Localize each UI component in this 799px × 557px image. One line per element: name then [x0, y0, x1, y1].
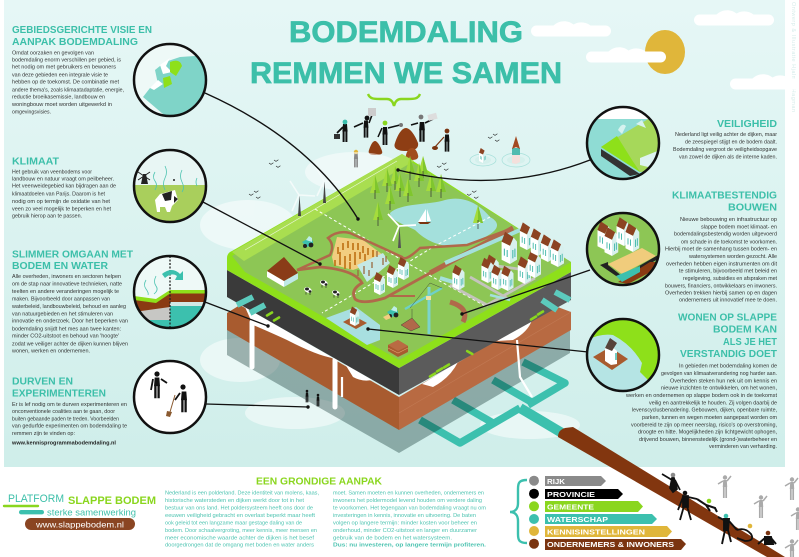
text block: slimmer omgaan [11, 250, 133, 354]
sun [645, 30, 685, 74]
title bracket [368, 94, 420, 106]
section: een grondige aanpak: historische watersteden en dijken werkt door tot in het [165, 498, 304, 504]
section: een grondige aanpak: EEN GRONDIGE AANPAK [256, 477, 383, 488]
legend labels: GEMEENTE [547, 502, 594, 512]
text block: klimaat: KLIMAAT [12, 156, 59, 168]
text block: durven en experimenteren: DURVEN EN [12, 376, 73, 387]
text block: slimmer omgaan: van natuurgebieden en het stimuleren van [12, 311, 113, 317]
text block: klimaat: nodig om op termijn de oxidatie van het [12, 199, 110, 205]
text block: klimaatbestendig bouwen: KLIMAATBESTENDIG [672, 191, 777, 202]
text block: gebiedsgerichte visie: andere thema's, zoals klimaatadaptatie, energie, [12, 87, 124, 93]
text block: wonen op slappe bodem: levenscyclusbenadering. Gebouwen, dijken, openbare ruimte, [632, 408, 777, 414]
section: een grondige aanpak: bestuur van ons land. Het poldersysteem heeft ons door de [165, 505, 313, 511]
text block: klimaatbestendig bouwen: watersystemen worden gezocht. Alle [688, 254, 777, 260]
legend item: gemeente [529, 501, 643, 512]
section: een grondige aanpak: investeringen in kennis, innovatie en uitvoering. De baten [333, 513, 476, 519]
text block: slimmer omgaan: bodemdaling snijdt het mes aan twee kanten: [12, 326, 121, 332]
text block: slimmer omgaan: BODEM EN WATER [12, 261, 109, 272]
legend labels [547, 477, 674, 549]
text block: klimaat: Het gebruik van veenbodems voor [12, 170, 92, 176]
lake [390, 199, 497, 246]
text block: wonen op slappe bodem: WONEN OP SLAPPE [678, 312, 777, 323]
text block: slimmer omgaan: waterbeleid, landbouwbeleid, behoud en aanleg [11, 304, 126, 310]
tractors and cows [302, 236, 398, 320]
text block: wonen op slappe bodem: VERSTANDIG DOET [680, 349, 777, 360]
text block: gebiedsgerichte visie: bodemdaling enorm verschillen per gebied, is [12, 57, 121, 63]
dashed field lines [315, 209, 490, 313]
text block: wonen op slappe bodem: ALS JE HET [723, 337, 777, 348]
underground water pipes and shadow [227, 320, 570, 453]
text block: veiligheid: de zeespiegel stijgt en de bodem daalt. [685, 140, 777, 146]
text block: klimaat: Het veenweidegebied kan bijdragen aan de [12, 184, 116, 190]
small people under block [306, 390, 319, 406]
section: een grondige aanpak: gebruik van de bodem en het watersysteem. [333, 535, 452, 541]
legend item: waterschap [529, 514, 657, 524]
text block: klimaatbestendig bouwen: te stimuleren, bijvoorbeeld met beleid en [679, 269, 777, 275]
text block: gebiedsgerichte visie: AANPAK BODEMDALING [12, 37, 138, 48]
text block: durven en experimenteren [11, 376, 127, 446]
title [250, 16, 562, 90]
grey bystanders [718, 475, 799, 557]
circle icon: peat meadow and cow [130, 150, 210, 225]
text block: durven en experimenteren: van gedurfde experimenten om bodemdaling te [12, 424, 127, 430]
text block: durven en experimenteren: onconventionele coalities aan te gaan, door [12, 409, 115, 415]
section: een grondige aanpak: meer economische waarde achter de dijken is het besef [165, 535, 314, 541]
logo: Platform Slappe Bodem: SLAPPE BODEM [68, 495, 156, 507]
text block: wonen op slappe bodem: In gebieden met bodemdaling komen de [679, 364, 777, 370]
text block: klimaat: gebruik hierop aan te passen. [12, 214, 82, 220]
title: REMMEN WE SAMEN [250, 57, 562, 90]
legend labels: WATERSCHAP [547, 515, 608, 524]
text block: slimmer omgaan: zodat we veiliger achter de dijken kunnen blijven [12, 341, 128, 347]
text block: wonen op slappe bodem: voorbereid te zijn op meer neerslag, risico's op overstroming, [631, 422, 777, 428]
text block: veiligheid [673, 119, 777, 161]
text block: wonen op slappe bodem: verminderen van verharding. [709, 444, 777, 450]
text block: gebiedsgerichte visie: woningbouw moet worden uitgewerkd in [11, 102, 112, 108]
legend bracket [510, 480, 527, 543]
text block: veiligheid: van zowel de dijken als de interne kaden. [679, 155, 777, 161]
section: een grondige aanpak: inwoners het poldermodel levend houden om verdere daling [333, 498, 482, 504]
text block: slimmer omgaan: maken. Bijvoorbeeld door aanpassen van [12, 296, 110, 302]
circle icon: climate-proof building [586, 212, 660, 286]
text block: durven en experimenteren: www.kennisprogrammabodemdaling.nl [11, 440, 116, 446]
text block: klimaatbestendig bouwen: bouwers, financiers, ontwikkelaars en inwoners. [665, 283, 777, 289]
text block: veiligheid: VEILIGHEID [717, 119, 777, 130]
text block: klimaatbestendig bouwen: Nieuwe bebouwing en infrastructuur op [680, 217, 777, 223]
text block: gebiedsgerichte visie: GEBIEDSGERICHTE VISIE EN [12, 25, 152, 36]
trees [370, 156, 483, 229]
text block: wonen op slappe bodem: nieuwe inzichten te ontwikkelen, om het wonen, [661, 386, 777, 392]
text block: gebiedsgerichte visie: het nodig om met gebruikers en bewoners [12, 65, 116, 71]
legend item: rijk [529, 476, 606, 486]
text block: veiligheid: Bodemdaling vergroot de veiligheidsopgave [673, 147, 777, 153]
legend item: ondernemers [529, 539, 686, 550]
legend labels: ONDERNEMERS & INWONERS [547, 540, 674, 549]
text block: wonen op slappe bodem: parken, tunnen en wegen moeten aangepast worden om [642, 415, 777, 421]
circle icon: house on floating plot [586, 318, 660, 392]
soil layer [227, 305, 571, 430]
text block: klimaatbestendig bouwen: om schade in de toekomst te voorkomen. [681, 239, 777, 245]
farm [267, 257, 298, 287]
section: een grondige aanpak: onderhoud, minder CO2-uitstoot en langer en duurzamer [333, 528, 477, 534]
text block: slimmer omgaan: minder CO2-uitstoot en behoud van 'hoogte' [12, 334, 119, 340]
text block: slimmer omgaan: Alle overheden, inwoners en sectoren helpen [12, 274, 121, 280]
text block: klimaatbestendig bouwen: slappe bodem moet klimaat- en [701, 225, 777, 231]
text block: wonen op slappe bodem: Overheden steken hun nek uit om kennis en [670, 379, 777, 385]
legend: stakeholders [529, 476, 686, 550]
green surface [227, 154, 571, 368]
legend item: kennisinstellingen [529, 526, 672, 537]
circle icon: map of the Netherlands [132, 42, 208, 118]
title: BODEMDALING [289, 16, 523, 49]
text block: slimmer omgaan: SLIMMER OMGAAN MET [12, 250, 133, 261]
white cavities and water drips [245, 307, 532, 407]
section: een grondige aanpak: Nederland is een polderland. Deze identiteit van molens, kaas, [165, 491, 319, 497]
text block: gebiedsgerichte visie: omgevingsvisies. [12, 109, 51, 115]
drain pipes [237, 292, 570, 376]
text block: gebiedsgerichte visie [11, 25, 152, 115]
logo: Platform Slappe Bodem: www.slappebodem.nl [35, 520, 124, 530]
sailboat [418, 209, 431, 224]
section: een grondige aanpak: moet. Samen moeten en kunnen overheden, ondernemers en [333, 491, 484, 497]
text block: klimaatbestendig bouwen: Hierbij moet de samenhang tussen bodem- en [665, 247, 777, 253]
text block: wonen op slappe bodem: drijvend bouwen, binnenstedelijk (grond-)waterbeheer en [639, 437, 777, 443]
section: een grondige aanpak: doorgedrongen dat de omgang met boden en water anders [165, 543, 314, 549]
wind turbines [290, 166, 416, 248]
text block: klimaatbestendig bouwen: BOUWEN [728, 202, 777, 213]
text block: wonen op slappe bodem: veilig en aantrekkelijk te houden. Zij volgen daarbij de [649, 400, 777, 406]
leader lines [203, 93, 590, 409]
text block: durven en experimenteren: Er is lef nodig om te durven experimenteren en [12, 402, 127, 408]
house on raised plot in pool [326, 306, 380, 345]
text block: wonen op slappe bodem: droogte en hitte. Mogelijkheden zijn lichtgewicht ophogen, [638, 430, 777, 436]
logo: Platform Slappe Bodem [4, 493, 156, 530]
stacked plates [388, 340, 408, 357]
text block: slimmer omgaan: innovatie en onderzoek. Door het beperken van [12, 319, 128, 325]
text block: wonen op slappe bodem: werken en ondernemen op slappe bodem ook in de toekomst [625, 393, 777, 399]
text block: klimaatbestendig bouwen: regelgeving, subsidies en afspraken met [683, 276, 777, 282]
text block: slimmer omgaan: om de stap naar innovatieve technieken, natte [12, 281, 122, 287]
text block: klimaatbestendig bouwen: bodemdalingsbestendig worden uitgevoerd [674, 232, 777, 238]
pale ground clouds around block [200, 152, 580, 439]
canals and streets [440, 230, 540, 305]
text block: gebiedsgerichte visie: van deze gebieden een integrale visie te [12, 72, 108, 78]
people working together [334, 108, 449, 167]
text block: klimaatbestendig bouwen: Overheden trekken hierbij samen op en dagen [665, 291, 777, 297]
town [481, 222, 564, 291]
text block: klimaatbestendig bouwen: overheden hebben eigen instrumenten om dit [666, 261, 777, 267]
birds over block [249, 160, 478, 198]
circle icon: two people experimenting [134, 361, 206, 433]
isometric block [227, 154, 571, 430]
roads [297, 228, 513, 322]
wheat field [332, 237, 390, 282]
vertical credit: Ontwerp & Illustratie Hjalmar Hagman [790, 2, 796, 112]
section: een grondige aanpak [165, 477, 486, 549]
legend labels: PROVINCIE [547, 490, 595, 499]
text block: durven en experimenteren: buiten gebaande paden te treden. Voorbeelden [12, 416, 119, 422]
dark peat layer [227, 270, 571, 395]
text block: klimaatbestendig bouwen [665, 191, 777, 304]
text block: gebiedsgerichte visie: Omdat oorzaken en gevolgen van [12, 50, 94, 56]
circle icon: dike [586, 106, 660, 180]
section: een grondige aanpak: ook geleid tot een langzame maar gestage daling van de [165, 520, 302, 526]
text block: klimaat: klimaatdoelen van Parijs. Daarom is het [12, 191, 105, 197]
section: een grondige aanpak: Dus: nu investeren, op langere termijn profiteren. [333, 543, 486, 549]
legend item: provincie [529, 489, 623, 499]
text block: durven en experimenteren: remmen zijn te vinden op: [12, 431, 75, 437]
long brown bar [558, 427, 785, 557]
text block: slimmer omgaan: wonen, werken en ondernemen. [11, 348, 90, 354]
circle icon: soil cross-section [132, 254, 208, 330]
legend labels: KENNISINSTELLINGEN [547, 528, 645, 536]
legend labels: RIJK [547, 477, 566, 486]
text block: wonen op slappe bodem: BODEM KAN [713, 325, 777, 336]
text block: klimaat: landbouw en natuur vraagt om peilbeheer. [12, 176, 114, 182]
text block: gebiedsgerichte visie: hebben op de toekomst. De combinatie met [12, 80, 119, 86]
text block: klimaat: veen zo veel mogelijk te beperken en het [12, 206, 111, 212]
section: een grondige aanpak: eeuwen veiligheid gebracht en overlast beperkt maar heeft [165, 513, 315, 519]
section: een grondige aanpak: te voorkomen. Het tegengaan van bodemdaling vraagt nu om [333, 505, 486, 511]
people climbing the bar [662, 473, 776, 544]
text block: durven en experimenteren: EXPERIMENTEREN [12, 388, 106, 399]
text block: wonen op slappe bodem [625, 312, 777, 450]
text block: klimaat [12, 156, 116, 220]
clouds [531, 10, 799, 90]
section: een grondige aanpak: bodem. Door schaalvergroting, meer kennis, meer mensen en [165, 528, 317, 534]
text block: wonen op slappe bodem: gevolgen van klimaatverandering nog harder aan. [661, 371, 777, 377]
text block: veiligheid: Nederland ligt veilig achter de dijken, maar [675, 132, 777, 138]
text block: slimmer omgaan: teelten en andere veranderingen mogelijk te [12, 289, 119, 295]
birds and flooded houses [470, 134, 530, 167]
section: een grondige aanpak: volgen op langere termijn: minder kosten voor beheer en [333, 520, 477, 526]
crane [401, 283, 442, 334]
village houses [374, 257, 464, 295]
logo: Platform Slappe Bodem: sterke samenwerking [47, 508, 136, 518]
text block: gebiedsgerichte visie: reductie broeikasemissie, landbouw en [12, 95, 105, 101]
logo: Platform Slappe Bodem: PLATFORM [8, 493, 64, 505]
text block: klimaatbestendig bouwen: ondernemers uit innovatief mee te doen. [679, 298, 777, 304]
